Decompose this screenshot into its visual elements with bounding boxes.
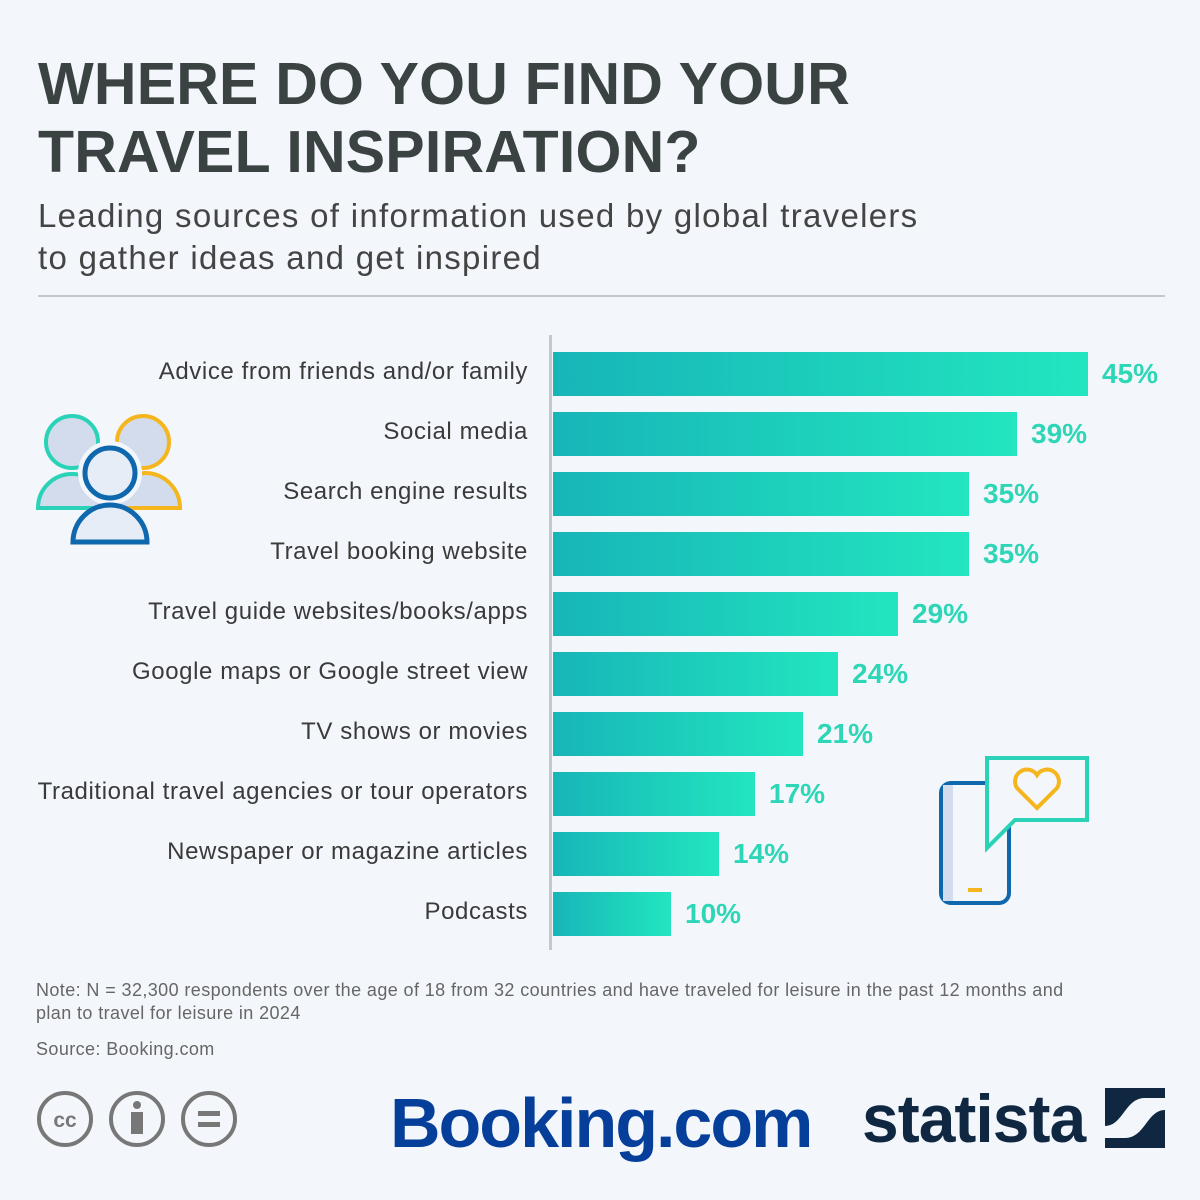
bar chart: Traditional travel agencies or tour operators [38, 778, 528, 805]
bar chart: 45% [1102, 358, 1158, 389]
bar chart: Search engine results [283, 478, 528, 505]
row: tv [301, 712, 873, 756]
logo: booking.com: Booking.com [390, 1084, 811, 1162]
bar chart: Travel booking website [270, 538, 528, 565]
subtitle: Leading sources of information used by global travelers [38, 197, 918, 234]
row: social [383, 412, 1087, 456]
row: friends [158, 352, 1158, 396]
row: search [283, 472, 1039, 516]
icon: phone with heart [939, 756, 1089, 905]
bar chart: 35% [983, 478, 1039, 509]
title: TRAVEL INSPIRATION? [38, 119, 701, 185]
bar chart: TV shows or movies [301, 718, 528, 745]
bar chart: 29% [912, 598, 968, 629]
title: WHERE DO YOU FIND YOUR [38, 51, 850, 117]
bar chart: 24% [852, 658, 908, 689]
icon: cc license [37, 1091, 237, 1147]
bar chart: Travel guide websites/books/apps [148, 598, 528, 625]
row: booking [270, 532, 1039, 576]
bar chart: 39% [1031, 418, 1087, 449]
bar chart: 10% [685, 898, 741, 929]
source: Source: Booking.com [36, 1039, 215, 1059]
bar chart: 17% [769, 778, 825, 809]
icon: cc license: cc [53, 1109, 77, 1132]
row: maps [132, 652, 908, 696]
bar chart: 21% [817, 718, 873, 749]
bar chart: 35% [983, 538, 1039, 569]
title [38, 51, 850, 185]
logo: statista: statista [862, 1081, 1085, 1157]
row: newspaper [167, 832, 789, 876]
bar chart: Podcasts [424, 898, 528, 925]
icon: people [36, 414, 182, 544]
row: podcasts [424, 892, 741, 936]
row: guides [148, 592, 968, 636]
subtitle: to gather ideas and get inspired [38, 239, 542, 276]
row: agencies [38, 772, 825, 816]
bar chart: Social media [383, 418, 528, 445]
bar chart: Google maps or Google street view [132, 658, 528, 685]
note: Note: N = 32,300 respondents over the age of 18 from 32 countries and have traveled for leisure in the past 12 months and plan to travel for leisure in 2024 [36, 980, 1064, 1023]
subtitle [38, 197, 918, 276]
bar chart [38, 352, 1158, 936]
bar chart: 14% [733, 838, 789, 869]
bar chart: Advice from friends and/or family [159, 358, 528, 385]
bar chart: Newspaper or magazine articles [167, 838, 528, 865]
